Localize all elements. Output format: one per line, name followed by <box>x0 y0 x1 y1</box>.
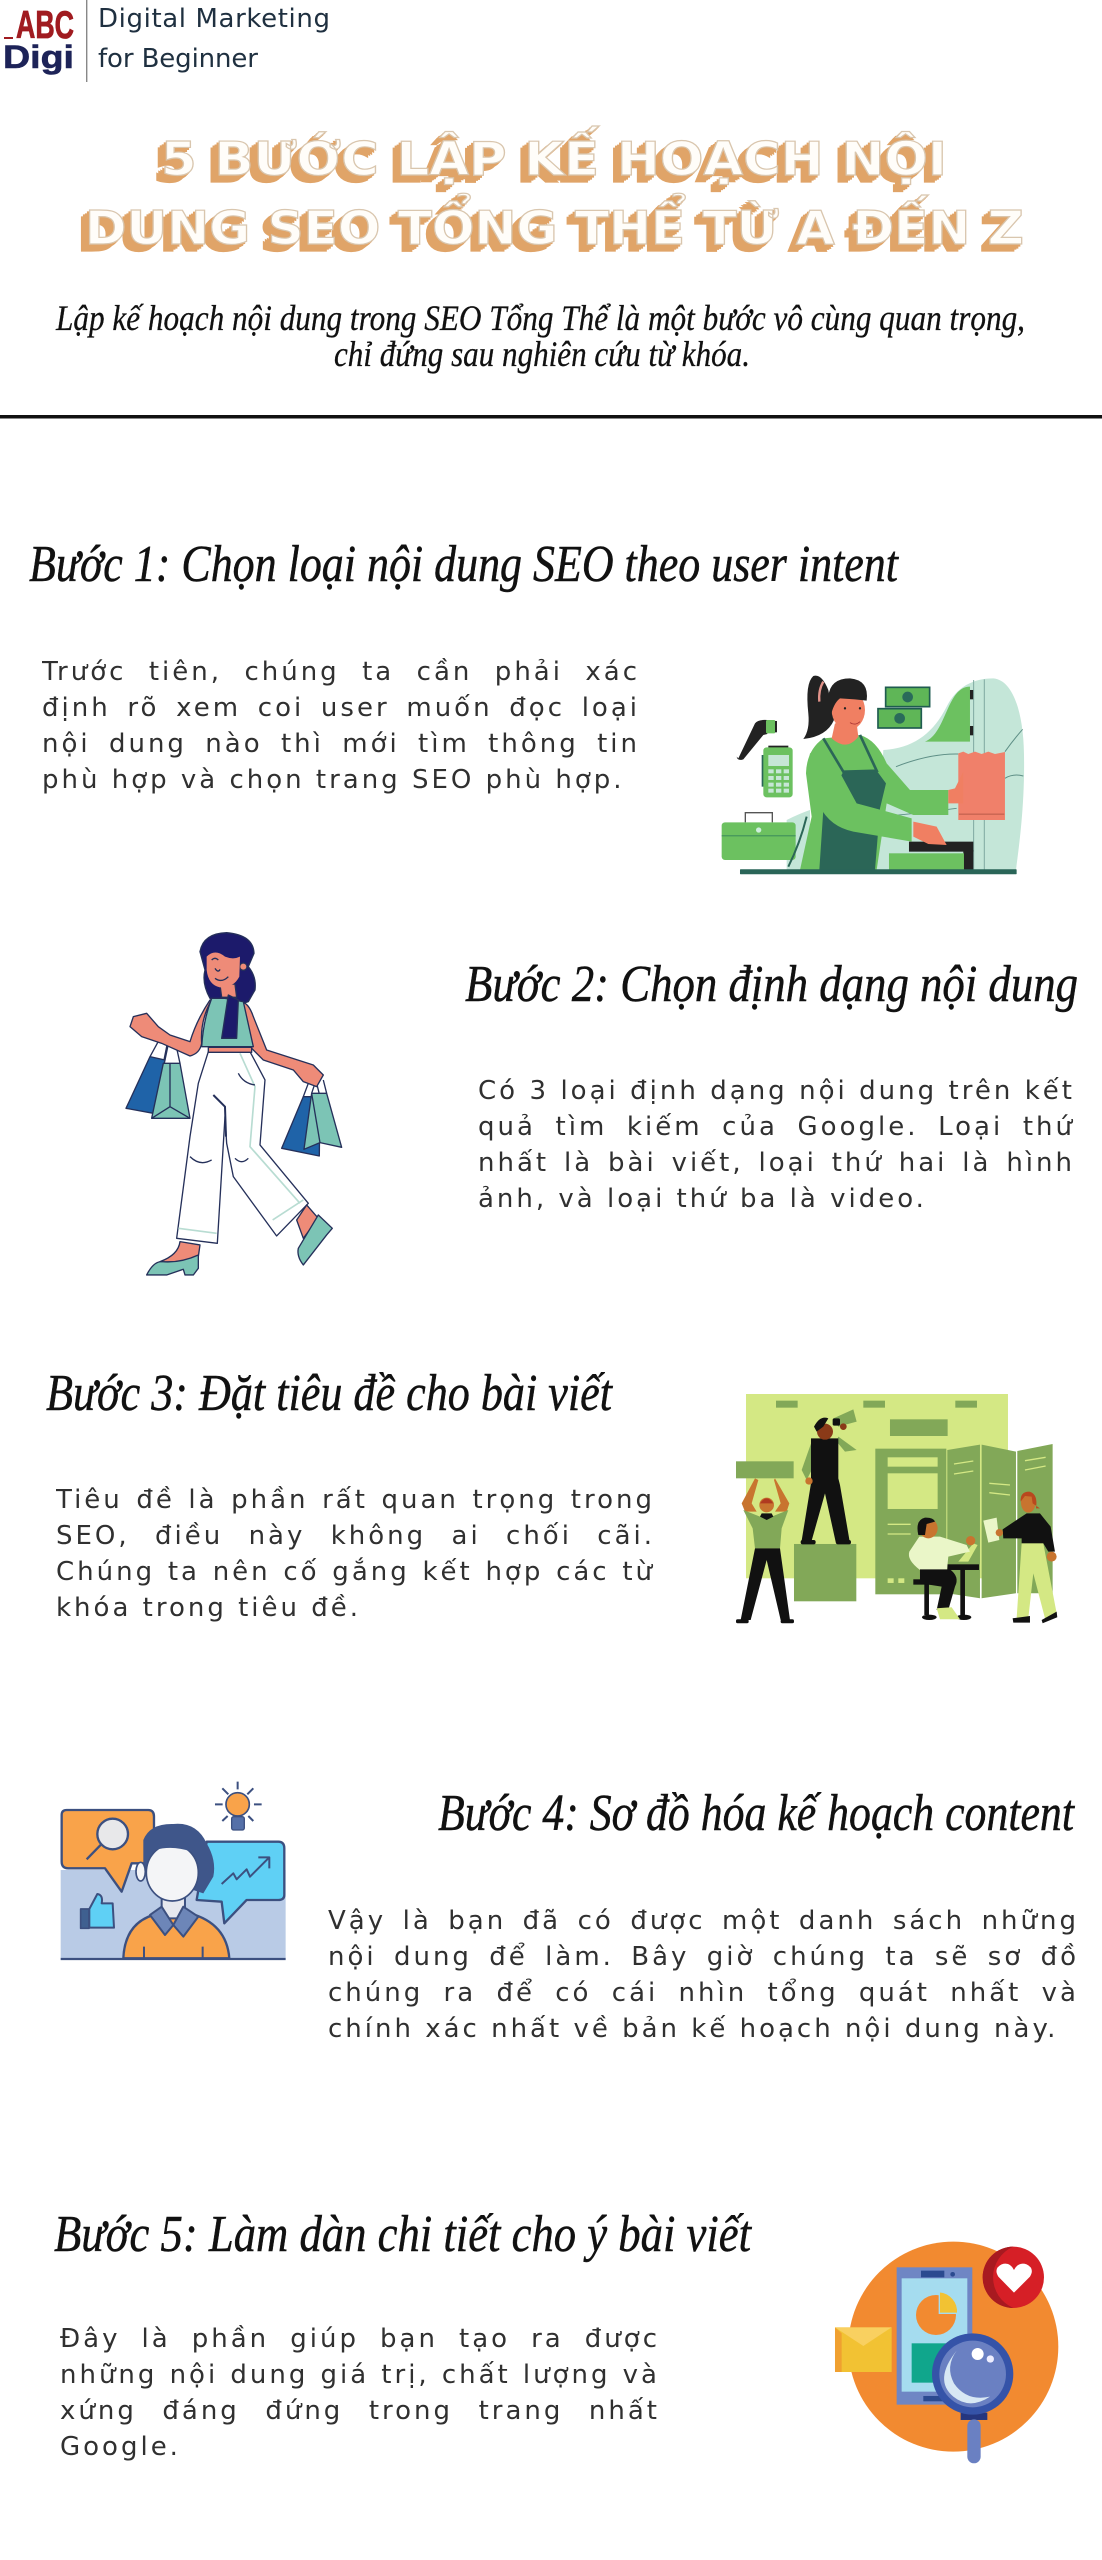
logo dash <box>4 37 13 39</box>
icon: user with speech bubbles <box>61 1782 286 1959</box>
icon: phone with magnifier <box>835 2242 1058 2463</box>
step 4 text <box>328 1903 1102 2053</box>
step 4 text: Vậy là bạn đã có được một danh sách những <box>328 1906 1079 1936</box>
icon: shopping woman <box>126 933 342 1275</box>
subtitle: chỉ đứng sau nghiên cứu từ khóa. <box>334 334 750 374</box>
step 5 text: Đây là phần giúp bạn tạo ra được <box>60 2324 660 2354</box>
title <box>85 126 1024 255</box>
step 1 text: nội dung nào thì mới tìm thông tin <box>42 729 640 759</box>
step 3 text: khóa trong tiêu đề. <box>56 1593 361 1623</box>
step 5 text: Google. <box>60 2432 181 2462</box>
step 5 text <box>60 2321 700 2471</box>
icon: cashier woman <box>722 676 1024 874</box>
step 5 heading: Bước 5: Làm dàn chi tiết cho ý bài viết <box>54 2206 752 2263</box>
step 2 text: quả tìm kiếm của Google. Loại thứ <box>478 1112 1075 1142</box>
logo tagline line 2: for Beginner <box>98 44 258 74</box>
step 2 text: nhất là bài viết, loại thứ hai là hình <box>478 1148 1075 1178</box>
step 2 text: Có 3 loại định dạng nội dung trên kết <box>478 1076 1075 1106</box>
step 2 text <box>478 1073 1102 1223</box>
step 5 text: những nội dung giá trị, chất lượng và <box>60 2360 660 2390</box>
logo mark ABC: ABC <box>16 4 74 47</box>
panel: step 1 <box>29 536 1024 874</box>
subtitle <box>55 298 1025 374</box>
step 4 text: chúng ra để có cái nhìn tổng quát nhất và <box>328 1978 1079 2008</box>
step 5 text: xứng đáng đứng trong trang nhất <box>60 2396 660 2426</box>
panel: step 3 <box>46 1365 1057 1632</box>
step 4 text: nội dung để làm. Bây giờ chúng ta sẽ sơ đồ <box>328 1942 1079 1972</box>
panel: step 4 <box>61 1782 1102 2053</box>
step 3 text: Chúng ta nên cố gắng kết hợp các từ <box>56 1557 655 1587</box>
icon: exhibition team <box>736 1394 1057 1623</box>
logo mark Digi: Digi <box>3 39 74 75</box>
step 4 text: chính xác nhất về bản kế hoạch nội dung này. <box>328 2014 1058 2044</box>
step 3 text: SEO, điều này không ai chối cãi. <box>56 1521 655 1551</box>
panel: step 2 <box>126 933 1102 1275</box>
step 1 text: Trước tiên, chúng ta cần phải xác <box>42 657 640 687</box>
logo <box>3 0 330 82</box>
logo tagline line 1: Digital Marketing <box>98 4 330 34</box>
step 1 heading: Bước 1: Chọn loại nội dung SEO theo user intent <box>29 536 899 593</box>
logo divider <box>86 0 87 82</box>
step 3 text <box>56 1482 696 1632</box>
step 2 text: ảnh, và loại thứ ba là video. <box>478 1184 927 1214</box>
step 3 text: Tiêu đề là phần rất quan trọng trong <box>56 1485 655 1515</box>
step 1 text <box>42 654 682 804</box>
step 1 text: định rõ xem coi user muốn đọc loại <box>42 693 640 723</box>
step 1 text: phù hợp và chọn trang SEO phù hợp. <box>42 765 624 795</box>
title: DUNG SEO TỔNG THỂ TỪ A ĐẾN Z <box>85 193 1024 255</box>
step 3 heading: Bước 3: Đặt tiêu đề cho bài viết <box>46 1365 613 1422</box>
panel: step 5 <box>54 2206 1058 2471</box>
title: 5 BƯỚC LẬP KẾ HOẠCH NỘI <box>161 126 947 186</box>
header rule <box>0 415 1102 418</box>
